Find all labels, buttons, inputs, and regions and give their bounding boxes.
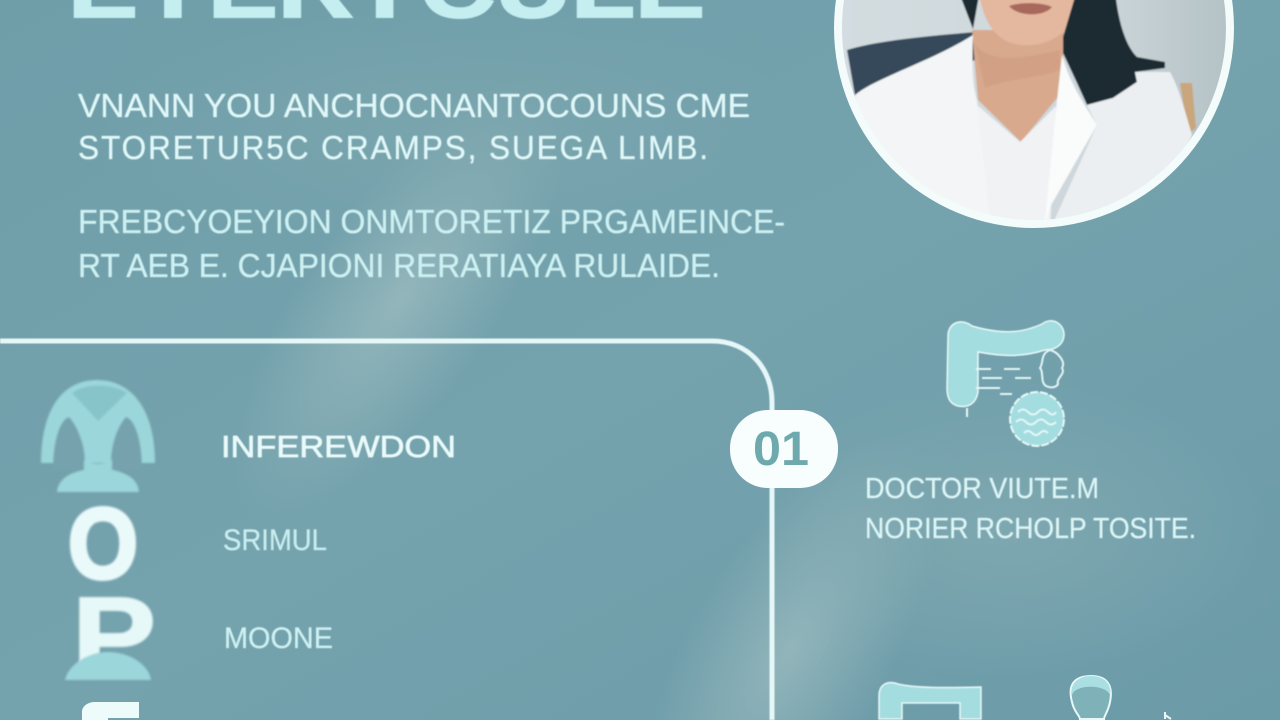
vertical letter R: P xyxy=(72,574,156,695)
vertical letter O: O xyxy=(68,488,138,600)
list item: srimul: SRIMUL xyxy=(223,524,327,557)
intro text block xyxy=(78,87,785,284)
step text line 2: NORIER RCHOLP TOSITE. xyxy=(865,513,1196,545)
lips xyxy=(1009,3,1052,14)
icon: intestine bottom xyxy=(879,682,981,719)
intro line 3: FREBCYOEYION ONMTORETIZ PRGAMEINCE- xyxy=(78,203,785,240)
right hair xyxy=(1063,0,1165,105)
doctor photo xyxy=(834,0,1235,230)
left icon: arch figure xyxy=(41,380,155,492)
list item: moone: MOONE xyxy=(224,622,333,655)
chair xyxy=(847,32,975,100)
coat right xyxy=(1050,72,1192,230)
step badge 01 xyxy=(730,410,838,488)
icon: intestine and brain xyxy=(947,321,1064,446)
step text xyxy=(865,473,1196,545)
left hair xyxy=(961,0,980,29)
step text line 1: DOCTOR VIUTE.M xyxy=(865,473,1099,505)
coat left xyxy=(855,35,992,230)
list item: inferewdon: INFEREWDON xyxy=(221,429,456,464)
neck and skin xyxy=(972,30,1064,142)
vertical letter bottom xyxy=(82,702,139,720)
intro line 4: RT AEB E. CJAPIONI RERATIAYA RULAIDE. xyxy=(78,247,720,284)
icon: person bottom xyxy=(1071,676,1171,719)
lapel xyxy=(1046,55,1098,216)
intro line 1: VNANN YOU ANCHOCNANTOCOUNS CME xyxy=(78,87,750,124)
step badge 01: 01 xyxy=(753,423,809,476)
shirt xyxy=(977,105,1056,230)
intro line 2: STORETUR5C CRAMPS, SUEGA LIMB. xyxy=(78,129,710,166)
icon: dome xyxy=(65,652,151,680)
frame line xyxy=(0,341,772,720)
